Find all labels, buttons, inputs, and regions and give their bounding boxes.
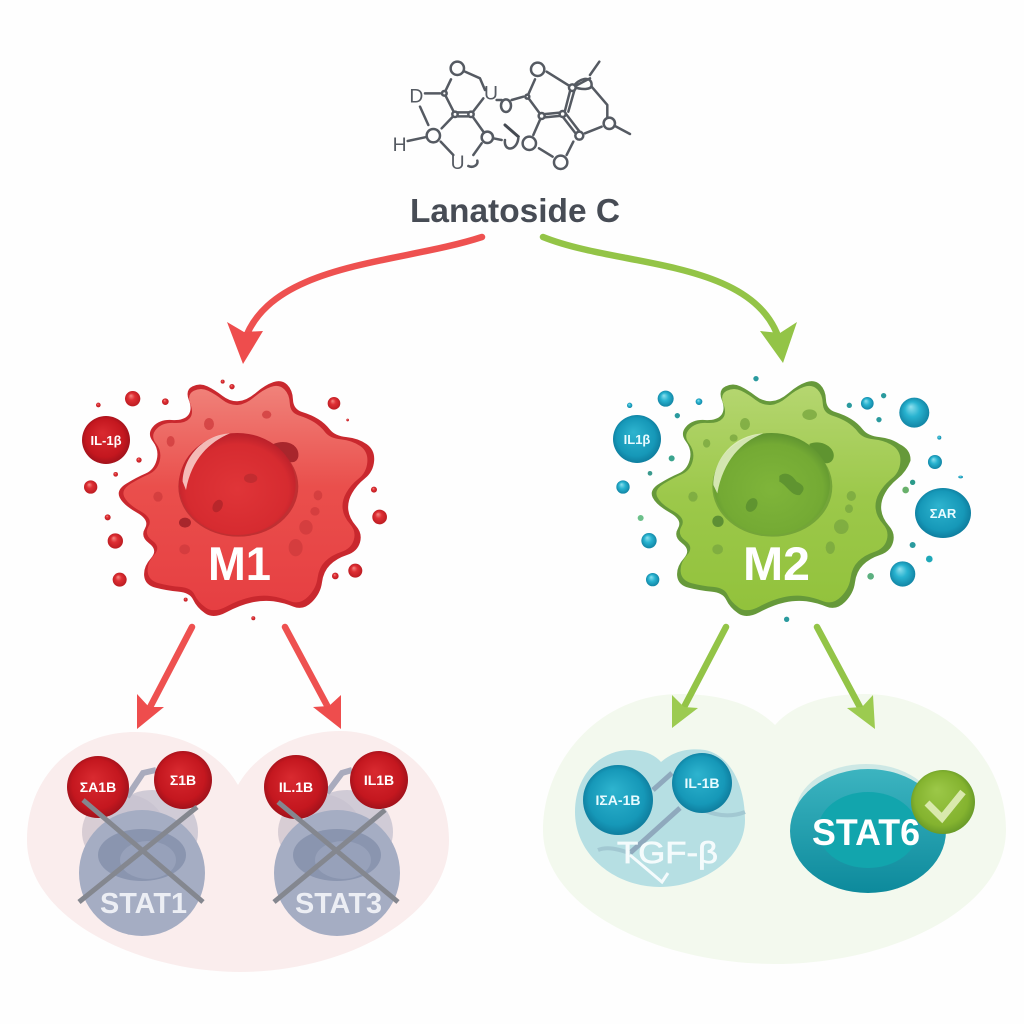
label TGF-β: TGF-β xyxy=(617,835,718,870)
node: STAT6 activated xyxy=(790,764,975,893)
arrow: M2 to right pathway xyxy=(817,627,875,729)
cytokine droplets M1 xyxy=(84,380,387,620)
cytokine: IL-1β near M1: IL-1β xyxy=(90,433,122,448)
cytokine balls TGF-β: IΣA-1B xyxy=(596,792,640,808)
icon: green check badge xyxy=(911,770,975,834)
nucleus M2 xyxy=(712,433,834,537)
panel: M2 pathways background xyxy=(543,694,1006,964)
cytokine balls STAT3: IL1B xyxy=(364,772,394,788)
cell body M2 xyxy=(652,381,911,616)
cytokine balls STAT3 xyxy=(264,751,408,819)
arrow: Lanatoside C to M2 xyxy=(543,237,797,363)
cytokine: TAR near M2 xyxy=(915,488,971,538)
icon: Lanatoside C molecule xyxy=(393,62,630,174)
label: M2: M2 xyxy=(743,537,810,590)
cytokine: IL-1β near M2: IL1β xyxy=(624,432,650,447)
arrow: M2 to left pathway xyxy=(672,627,726,728)
node: TGF-β xyxy=(575,749,745,887)
cytokine: TAR near M2: ΣAR xyxy=(930,506,957,521)
label: M1: M1 xyxy=(208,537,271,590)
icon: Lanatoside C molecule: U xyxy=(484,83,498,104)
inhibition cross STAT3 xyxy=(274,802,398,902)
cytokine balls STAT1: Σ1B xyxy=(170,772,196,788)
node: STAT3 blocked xyxy=(264,751,408,936)
cytokine: IL-1β near M1 xyxy=(82,416,130,464)
label STAT6: STAT6 xyxy=(812,812,920,853)
icon: Lanatoside C molecule: D xyxy=(409,87,423,108)
cell body M1 xyxy=(119,381,374,616)
cytokine balls STAT1 xyxy=(67,751,212,818)
node: STAT1 blocked xyxy=(67,751,212,936)
label STAT3: STAT3 xyxy=(295,888,382,920)
panel: M1 macrophage xyxy=(84,380,387,620)
arrow: Lanatoside C to M1 xyxy=(227,237,482,364)
cytokine balls TGF-β: IL-1B xyxy=(684,775,720,791)
cytokine balls STAT1: ΣA1B xyxy=(80,779,116,795)
cytokine droplets M2 xyxy=(616,376,963,622)
arrow: M1 to right pathway xyxy=(285,627,341,729)
arrow: M1 to left pathway xyxy=(137,627,192,729)
panel: M2 macrophage xyxy=(616,376,963,622)
cytokine balls STAT3: IL.1B xyxy=(279,779,313,795)
cytokine: IL-1β near M2 xyxy=(613,415,661,463)
title: Lanatoside C: Lanatoside C xyxy=(410,192,620,229)
inhibition cross STAT1 xyxy=(79,800,203,902)
cytokine balls TGF-β xyxy=(583,753,732,835)
panel: M1 pathways background xyxy=(27,731,449,972)
label STAT1: STAT1 xyxy=(100,888,187,920)
icon: Lanatoside C molecule: U xyxy=(451,153,465,174)
icon: Lanatoside C molecule: H xyxy=(393,135,407,156)
nucleus M1 xyxy=(178,433,298,537)
